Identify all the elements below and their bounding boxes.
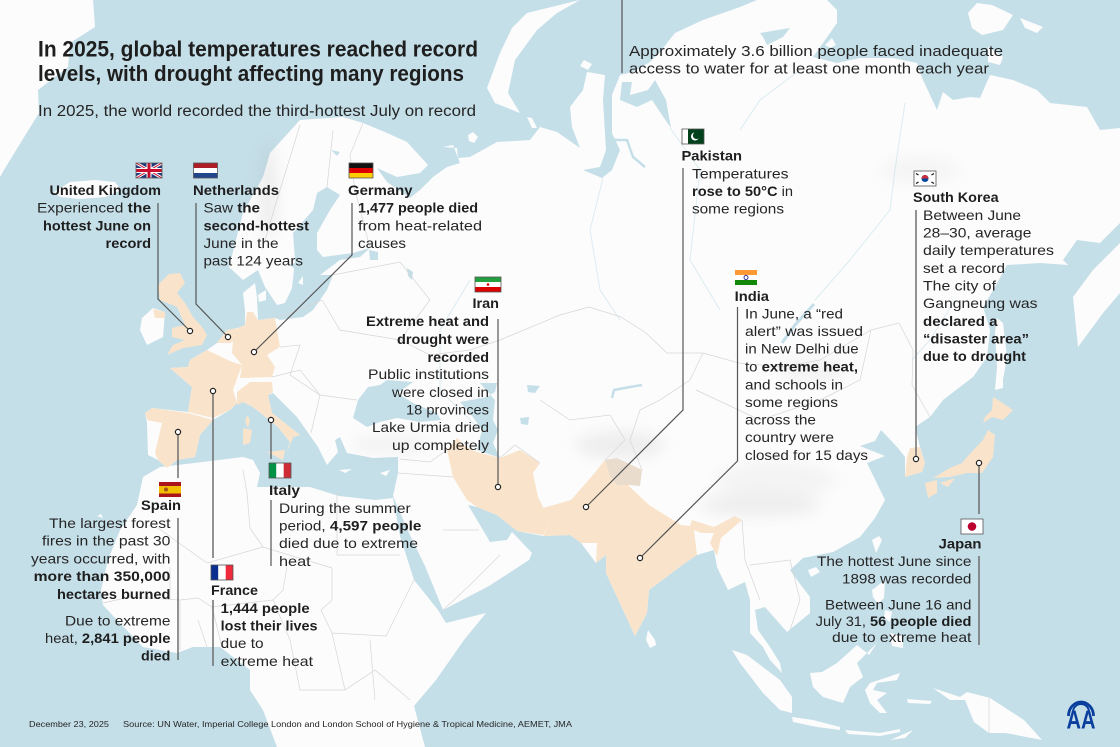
body text: some regions [745, 394, 838, 410]
body text: Between June 16 and [825, 597, 971, 613]
leader line [196, 203, 228, 337]
heading: Germany [348, 182, 413, 198]
heading: Japan [939, 536, 981, 552]
disputed Kashmir [605, 458, 642, 486]
body text: years occurred, with [31, 551, 170, 567]
body text [31, 515, 171, 664]
logo: Anadolu Agency: AA [1066, 704, 1096, 734]
body text: in New Delhi due [745, 341, 859, 357]
body text: In June, a “red [745, 305, 843, 321]
marker [637, 555, 643, 561]
body text: heat [279, 553, 311, 569]
body text: heat, 2,841 people [45, 630, 171, 646]
body text: causes [358, 235, 406, 251]
footer date: December 23, 2025 [29, 719, 109, 729]
callout: India [637, 270, 868, 561]
callout: Spain [31, 429, 181, 664]
body text: some regions [692, 201, 784, 217]
leader line [978, 463, 980, 514]
body text: died due to extreme [279, 535, 418, 551]
marker [583, 504, 589, 510]
heading: Spain [141, 497, 181, 513]
heading: Pakistan [682, 148, 742, 164]
callout: water access [622, 0, 1003, 78]
body text: lost their lives [221, 618, 318, 634]
callout: Japan [816, 460, 983, 645]
leader line [270, 420, 272, 459]
flag: South Korea [914, 171, 936, 186]
body text: and schools in [745, 376, 843, 392]
body text: Gangneung was [923, 295, 1038, 311]
leader line [586, 168, 683, 507]
flag: France [211, 565, 233, 580]
body text: July 31, 56 people died [816, 613, 971, 629]
body text: past 124 years [204, 252, 303, 268]
leader line [915, 210, 917, 459]
country borders [103, 123, 989, 733]
leader line [158, 203, 190, 331]
flag: Italy [269, 463, 291, 478]
body text: record [106, 235, 151, 251]
title [38, 36, 478, 86]
body text: second-hottest [204, 218, 309, 234]
text rule [270, 500, 272, 566]
body text: 1,477 people died [358, 200, 478, 216]
body text [745, 305, 868, 463]
body text: due to drought [923, 348, 1026, 364]
body text: extreme heat [221, 653, 313, 669]
footer source: Source: UN Water, Imperial College London and London School of Hygiene & Tropical Medicine, AEMET, JMA [123, 719, 572, 729]
inland seas [290, 28, 814, 458]
highlighted countries [145, 273, 1013, 636]
marker [976, 460, 982, 466]
heading: South Korea [913, 189, 999, 205]
body text: During the summer [279, 500, 411, 516]
body text [923, 207, 1054, 364]
body text: alert” was issued [745, 323, 863, 339]
heading: Iran [472, 295, 499, 311]
flag: Iran [475, 277, 501, 292]
body text: Between June [923, 207, 1021, 223]
body text: to extreme heat, [745, 358, 858, 374]
body text: declared a [923, 313, 998, 329]
marker [495, 484, 501, 490]
body text: recorded [428, 349, 489, 365]
body text [358, 200, 482, 251]
marker [187, 328, 193, 334]
body text [204, 200, 309, 268]
callout: Italy [268, 417, 422, 569]
callout: United Kingdom [37, 163, 193, 334]
body text: The hottest June since [817, 553, 972, 569]
callout: water access: access to water for at least one month each year [629, 60, 989, 78]
leader line [254, 203, 352, 352]
body text: closed for 15 days [745, 447, 868, 463]
body text: 18 provinces [406, 402, 489, 418]
body text: Experienced the [37, 200, 151, 216]
body text: The largest forest [49, 515, 171, 531]
body text [279, 500, 422, 569]
body text: across the [745, 412, 816, 428]
callout: Germany [251, 163, 482, 355]
title: levels, with drought affecting many regions [38, 61, 464, 86]
subtitle: In 2025, the world recorded the third-hottest July on record [38, 103, 476, 120]
text rule [978, 556, 980, 645]
body text: due to [221, 635, 264, 651]
flag: Pakistan [682, 129, 704, 144]
body text [692, 165, 793, 217]
body text: period, 4,597 people [279, 518, 422, 534]
body text: daily temperatures [923, 242, 1054, 258]
body text: fires in the past 30 [42, 533, 171, 549]
body text: Extreme heat and [366, 313, 489, 329]
body text: Public institutions [368, 366, 489, 382]
body text: hectares burned [57, 586, 170, 602]
callout: Iran [366, 277, 501, 490]
text rule [212, 600, 214, 666]
leader line [497, 319, 499, 487]
body text: Temperatures [692, 165, 788, 181]
body text: Saw the [204, 200, 260, 216]
title: In 2025, global temperatures reached record [38, 36, 478, 62]
body text [221, 600, 318, 669]
body text: due to extreme heat [832, 629, 972, 645]
body text: country were [745, 429, 834, 445]
body text [366, 313, 489, 453]
body text: 28–30, average [923, 225, 1032, 241]
flag: Germany [349, 163, 373, 178]
body text: more than 350,000 [34, 568, 171, 584]
heading: Italy [269, 482, 300, 498]
rivers [440, 70, 955, 430]
body text: 1,444 people [221, 600, 310, 616]
leader line [177, 432, 179, 478]
body text: up completely [392, 437, 489, 453]
callout: France [210, 388, 318, 669]
body text [37, 200, 151, 251]
body text: 1898 was recorded [842, 571, 971, 587]
body text: died [141, 648, 170, 664]
callout: Netherlands [193, 163, 309, 340]
marker [225, 334, 231, 340]
flag: Spain [159, 482, 181, 497]
heading: India [735, 288, 769, 304]
flag: India [735, 270, 757, 285]
flag: United Kingdom [136, 163, 162, 178]
marker [175, 429, 181, 435]
body text: Due to extreme [65, 613, 171, 629]
callout: South Korea [913, 171, 1054, 462]
marker [913, 456, 919, 462]
marker [210, 388, 216, 394]
body text: drought were [397, 331, 489, 347]
marker [251, 349, 257, 355]
body text [816, 553, 972, 645]
body text: The city of [923, 278, 996, 294]
flag: Netherlands [194, 163, 218, 178]
body text: Lake Urmia dried [372, 419, 489, 435]
body text: rose to 50°C in [692, 183, 793, 199]
leader line [212, 391, 214, 558]
heading: France [211, 582, 258, 598]
body text: set a record [923, 260, 1005, 276]
leader line [640, 307, 738, 558]
flag: Japan [961, 519, 983, 534]
body text: from heat-related [358, 218, 482, 234]
text rule [177, 518, 179, 660]
terrain shading [258, 140, 960, 517]
heading: United Kingdom [50, 182, 161, 198]
heading: Netherlands [193, 182, 279, 198]
body text: June in the [204, 235, 279, 251]
callout: Pakistan [583, 129, 793, 510]
callout: water access: Approximately 3.6 billion people faced inadequate [629, 43, 1003, 60]
body text: hottest June on [43, 218, 151, 234]
body text: were closed in [391, 384, 489, 400]
body text: “disaster area” [923, 331, 1029, 347]
marker [268, 417, 274, 423]
